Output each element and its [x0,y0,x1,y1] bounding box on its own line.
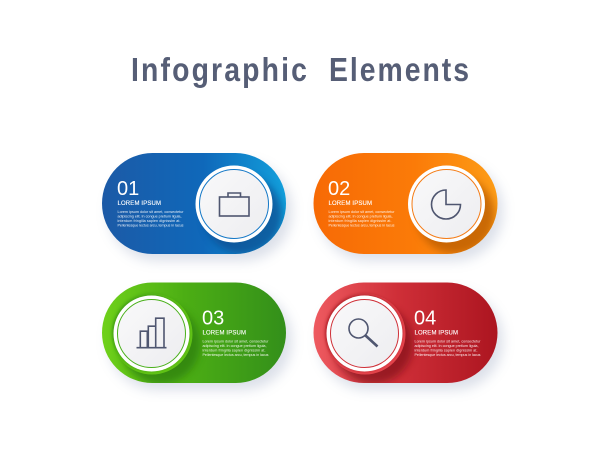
text: card 04: 04 [414,308,436,330]
text: card 03: Lorem ipsum dolor sit amet, consectetur [202,340,269,344]
text: card 03: LOREM IPSUM [202,330,246,336]
text: card 02: 02 [328,178,350,200]
panel: card 03 green [102,282,292,390]
text: card 01: adipiscing elit. In congue pretium ligula, [118,214,182,218]
text: card 03: adipiscing elit. In congue pretium ligula, [202,344,266,348]
text: card 02: Lorem ipsum dolor sit amet, consectetur [328,210,395,214]
title: Elements [329,51,469,89]
text: card 01: interdum fringilla sapien dignissim at. [118,219,180,223]
icon: magnifying glass [349,319,378,346]
text: card 01: Lorem ipsum dolor sit amet, consectetur [118,210,184,214]
text: card 04 [414,308,481,357]
title [131,51,469,89]
text: card 04: adipiscing elit. In congue pretium ligula, [414,344,478,348]
text: card 04: Pellentesque lectus arcu, tempus in lacus [414,353,481,357]
panel: card 01 blue [102,153,292,261]
text: card 02 [328,178,395,228]
panel: card 04 red [314,282,503,390]
text: card 01: Pellentesque lectus arcu, tempus in lacus [118,224,184,228]
text: card 02: interdum fringilla sapien dignissim at. [328,219,392,223]
text: card 04: LOREM IPSUM [414,330,458,336]
text: card 02: LOREM IPSUM [328,201,372,207]
icon: pie chart [432,190,460,219]
title: Infographic [131,51,307,89]
text: card 01 [117,178,184,228]
icon: briefcase [220,193,249,216]
panel: card 02 orange [314,153,503,261]
icon: bar chart [136,318,166,348]
text: card 03 [202,308,269,357]
text: card 03: 03 [202,308,224,330]
text: card 02: Pellentesque lectus arcu, tempus in lacus [328,224,395,228]
text: card 01: 01 [117,178,139,200]
text: card 03: Pellentesque lectus arcu, tempus in lacus [202,353,269,357]
text: card 04: Lorem ipsum dolor sit amet, consectetur [414,340,481,344]
text: card 01: LOREM IPSUM [118,201,161,207]
text: card 02: adipiscing elit. In congue pretium ligula, [328,214,392,218]
text: card 03: interdum fringilla sapien dignissim at. [202,348,266,352]
text: card 04: interdum fringilla sapien dignissim at. [414,348,478,352]
